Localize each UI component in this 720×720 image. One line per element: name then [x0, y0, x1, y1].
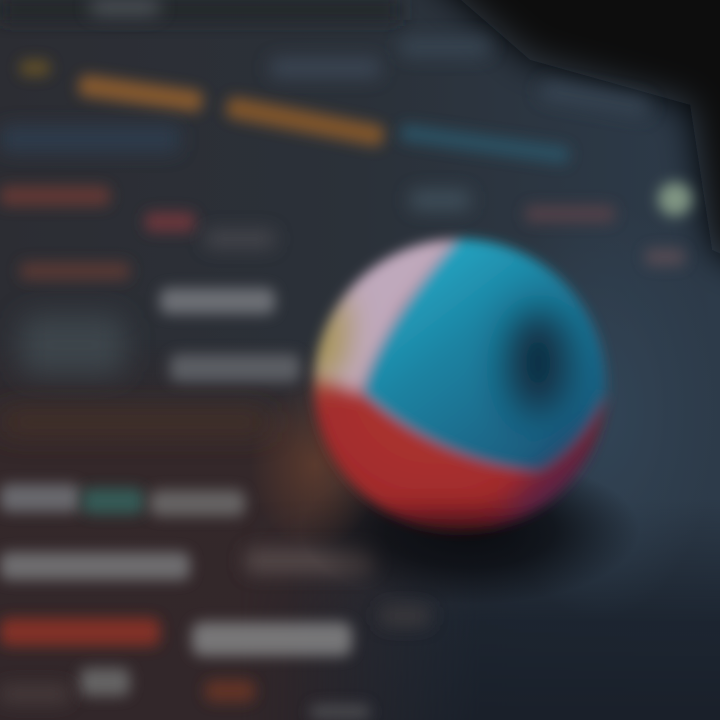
ball: yellow rim: [300, 290, 350, 385]
dark corner behind screen: [380, 0, 720, 290]
ball: pale left section: [300, 230, 470, 395]
ball: dark blue shade: [508, 310, 568, 414]
icon: pale green dot: [658, 182, 692, 216]
blurred code lines: middle: [0, 186, 685, 434]
ball: [306, 230, 611, 537]
ball shadow and glow: [250, 380, 640, 605]
blurred code lines: top: [0, 0, 651, 165]
ball: dark bottom shade: [385, 497, 519, 538]
blurred code lines: bottom: [0, 484, 430, 720]
ball: red lower section: [306, 301, 612, 536]
ball: purple lower edge: [496, 434, 594, 524]
ball: blue section: [362, 225, 625, 472]
